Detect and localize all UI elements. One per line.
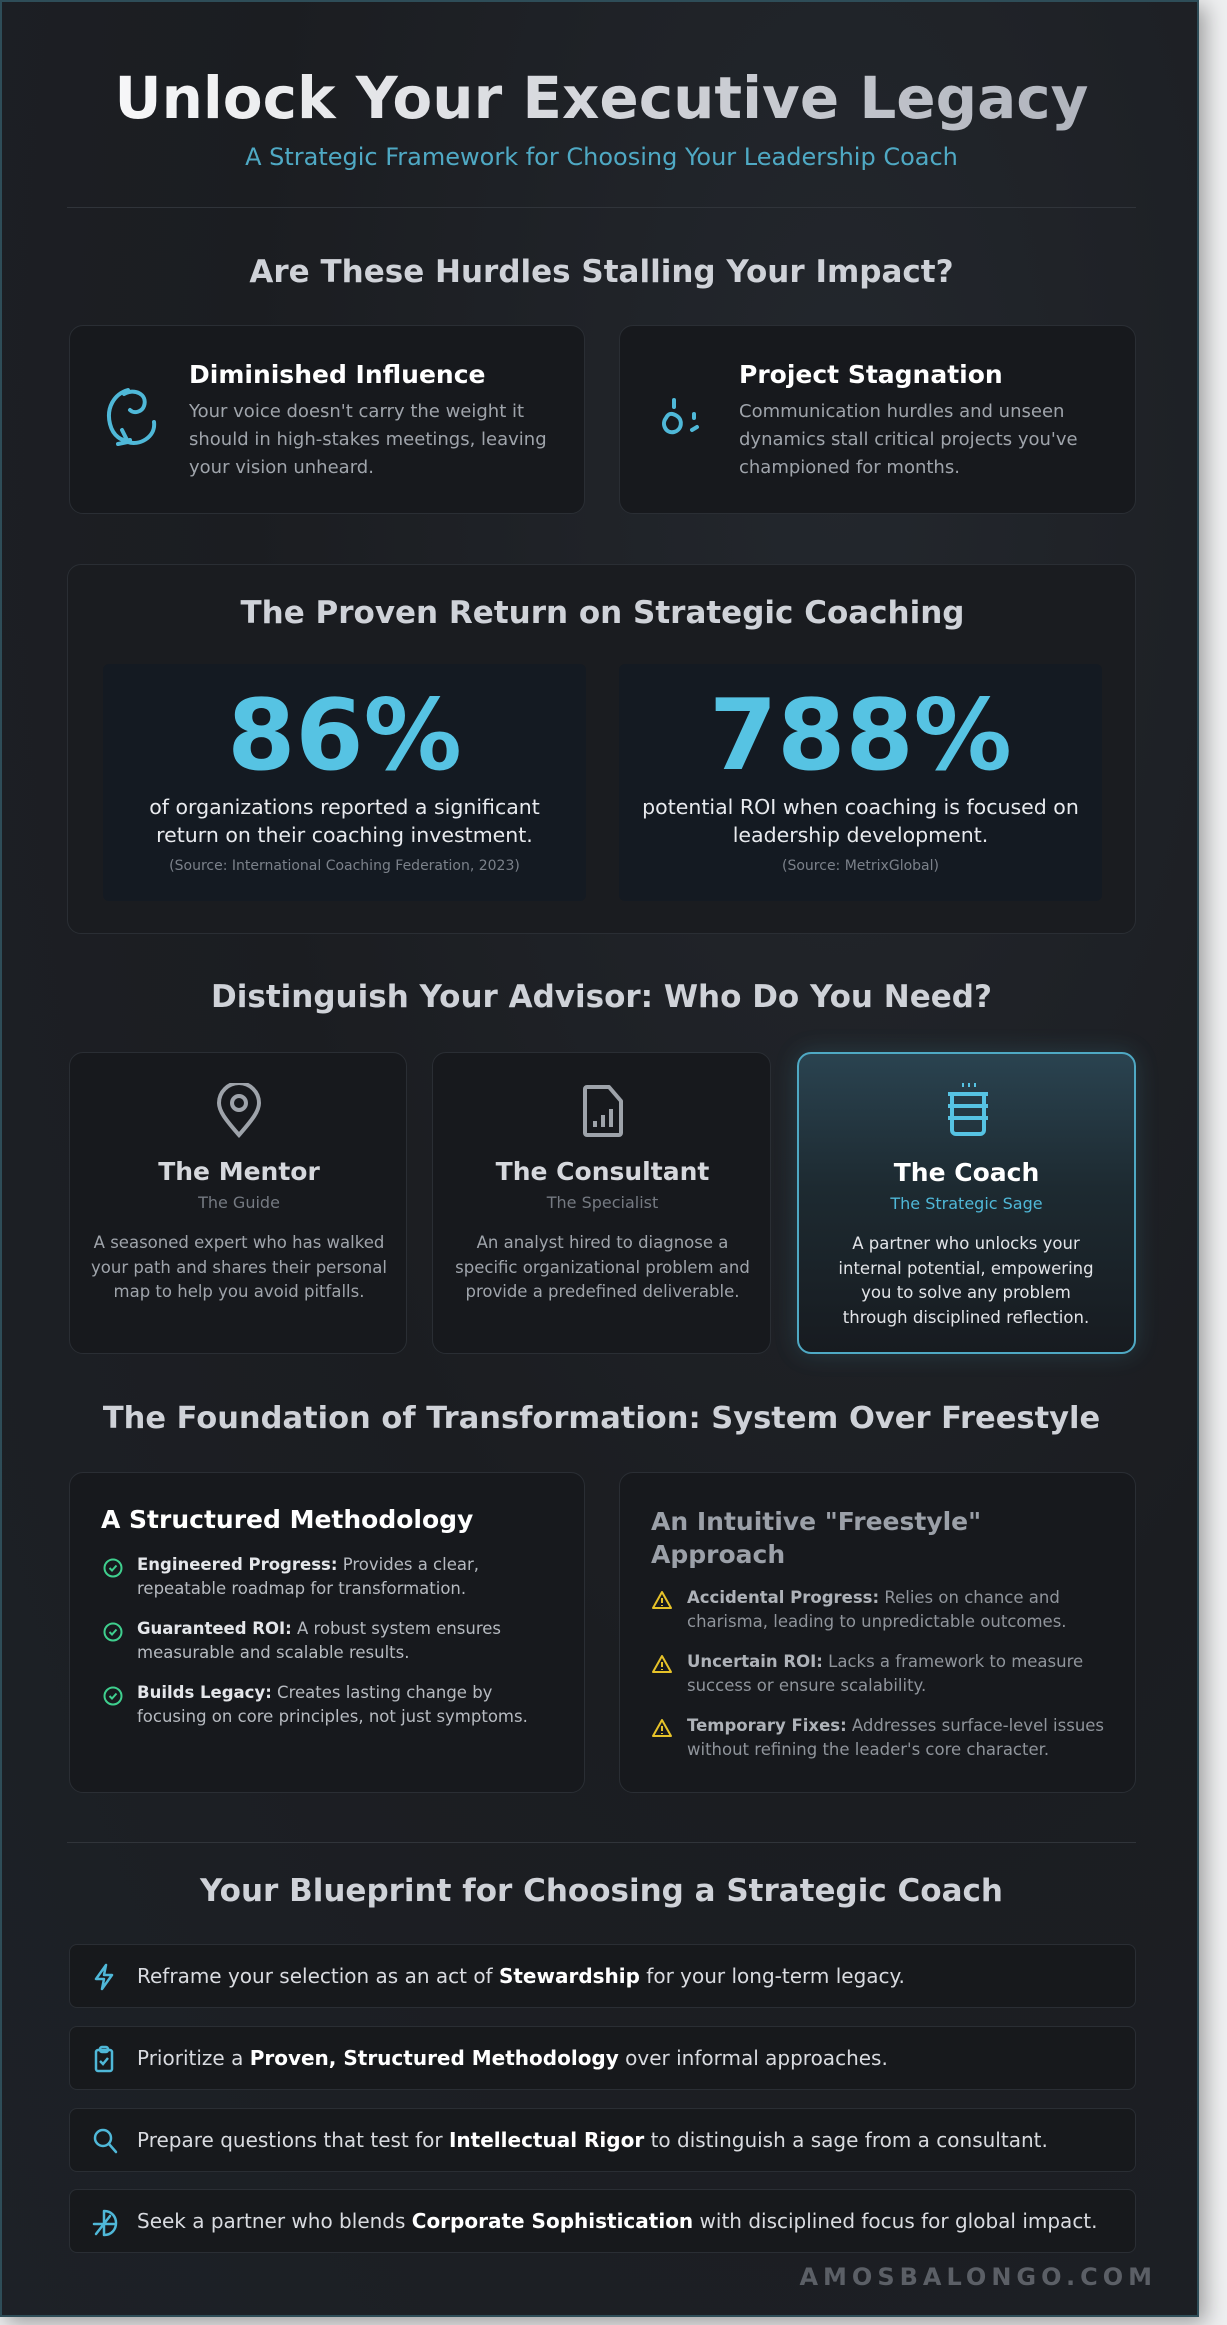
- subtitle: A Strategic Framework for Choosing Your Leadership Coach: [245, 143, 958, 171]
- list: freestyle: Uncertain ROI: Lacks a framework to measure success or ensure scalability.: [687, 1652, 1083, 1695]
- icon: document chart: [583, 1085, 623, 1137]
- list: freestyle: Accidental Progress: Relies on chance and charisma, leading to unpredictable outcomes.: [687, 1588, 1067, 1631]
- row: stewardship: Reframe your selection as an act of Stewardship for your long-term legacy.: [137, 1964, 905, 1988]
- list: structured: Guaranteed ROI: A robust system ensures measurable and scalable results.: [137, 1619, 501, 1662]
- card: coach (highlighted): The Coach: [894, 1158, 1039, 1187]
- stat: 788%: [619, 664, 1102, 901]
- footer brand: AMOSBALONGO.COM: [799, 2263, 1157, 2291]
- stat: 788%: potential ROI when coaching is focused on leadership development.: [642, 795, 1079, 847]
- row: stewardship: [69, 1944, 1136, 2008]
- heading: The Proven Return on Strategic Coaching: [240, 595, 964, 631]
- card: consultant: An analyst hired to diagnose a specific organizational problem and provide a predefined deliverable.: [455, 1233, 750, 1301]
- icon: stagnation: [662, 398, 700, 434]
- stat: 86%: [103, 664, 586, 901]
- list: freestyle: Temporary Fixes: Addresses surface-level issues without refining the leader's core character.: [687, 1716, 1104, 1759]
- card: coach (highlighted): The Strategic Sage: [890, 1194, 1043, 1213]
- panel: freestyle approach: An Intuitive "Freestyle" Approach: [651, 1507, 981, 1569]
- heading: blueprint: Your Blueprint for Choosing a Strategic Coach: [200, 1873, 1003, 1909]
- title: Diminished Influence: [189, 360, 486, 389]
- icon: pin: [217, 1083, 261, 1138]
- row: rigor: [69, 2108, 1136, 2172]
- stat: 86%: (Source: International Coaching Federation, 2023): [169, 858, 520, 874]
- panel: structured methodology: [69, 1472, 585, 1793]
- stat: 788%: 788%: [709, 679, 1012, 793]
- card: consultant: [432, 1052, 771, 1354]
- title: [2, 58, 1201, 138]
- card: consultant: The Specialist: [547, 1193, 658, 1212]
- row: sophistication: Seek a partner who blends Corporate Sophistication with disciplined focus for global impact.: [137, 2209, 1098, 2233]
- panel: freestyle approach: [619, 1472, 1136, 1793]
- card: mentor: The Guide: [198, 1193, 280, 1212]
- row: sophistication: [69, 2189, 1136, 2253]
- heading: advisor: Distinguish Your Advisor: Who Do You Need?: [211, 979, 992, 1015]
- text: Communication hurdles and unseen dynamics stall critical projects you've championed for months.: [739, 401, 1078, 478]
- panel: diminished influence: [69, 325, 585, 514]
- title: Unlock Your Executive Legacy: [114, 64, 1088, 132]
- card: mentor: [69, 1052, 407, 1354]
- card: consultant: The Consultant: [496, 1157, 709, 1186]
- card: coach (highlighted): [797, 1052, 1136, 1354]
- card: coach (highlighted): A partner who unlocks your internal potential, empowering you to solve any problem through disciplined reflection.: [838, 1234, 1094, 1326]
- heading: foundation: The Foundation of Transformation: System Over Freestyle: [103, 1401, 1100, 1436]
- row: methodology: Prioritize a Proven, Structured Methodology over informal approaches.: [137, 2046, 888, 2070]
- icon: influence: [106, 388, 156, 446]
- stat: 788%: (Source: MetrixGlobal): [782, 858, 939, 874]
- list: structured: Engineered Progress: Provides a clear, repeatable roadmap for transformation.: [137, 1555, 479, 1598]
- heading: hurdles: Are These Hurdles Stalling Your Impact?: [249, 254, 954, 290]
- panel: project stagnation: [619, 325, 1136, 514]
- list: freestyle: [652, 1588, 1104, 1759]
- text: Your voice doesn't carry the weight it should in high-stakes meetings, leaving your vision unheard.: [189, 401, 547, 478]
- list: structured: [104, 1555, 528, 1726]
- title: Project Stagnation: [739, 360, 1003, 389]
- row: rigor: Prepare questions that test for Intellectual Rigor to distinguish a sage from a consultant.: [137, 2128, 1048, 2152]
- list: structured: Builds Legacy: Creates lasting change by focusing on core principles, not just symptoms.: [137, 1683, 528, 1726]
- icon: stack: [948, 1083, 988, 1136]
- panel: ROI: [67, 564, 1136, 934]
- card: mentor: The Mentor: [158, 1157, 320, 1186]
- row: methodology: [69, 2026, 1136, 2090]
- stat: 86%: of organizations reported a significant return on their coaching investment.: [149, 795, 540, 847]
- panel: structured methodology: A Structured Methodology: [101, 1505, 473, 1534]
- card: mentor: A seasoned expert who has walked your path and shares their personal map to help you avoid pitfalls.: [91, 1233, 387, 1301]
- stat: 86%: 86%: [227, 679, 462, 793]
